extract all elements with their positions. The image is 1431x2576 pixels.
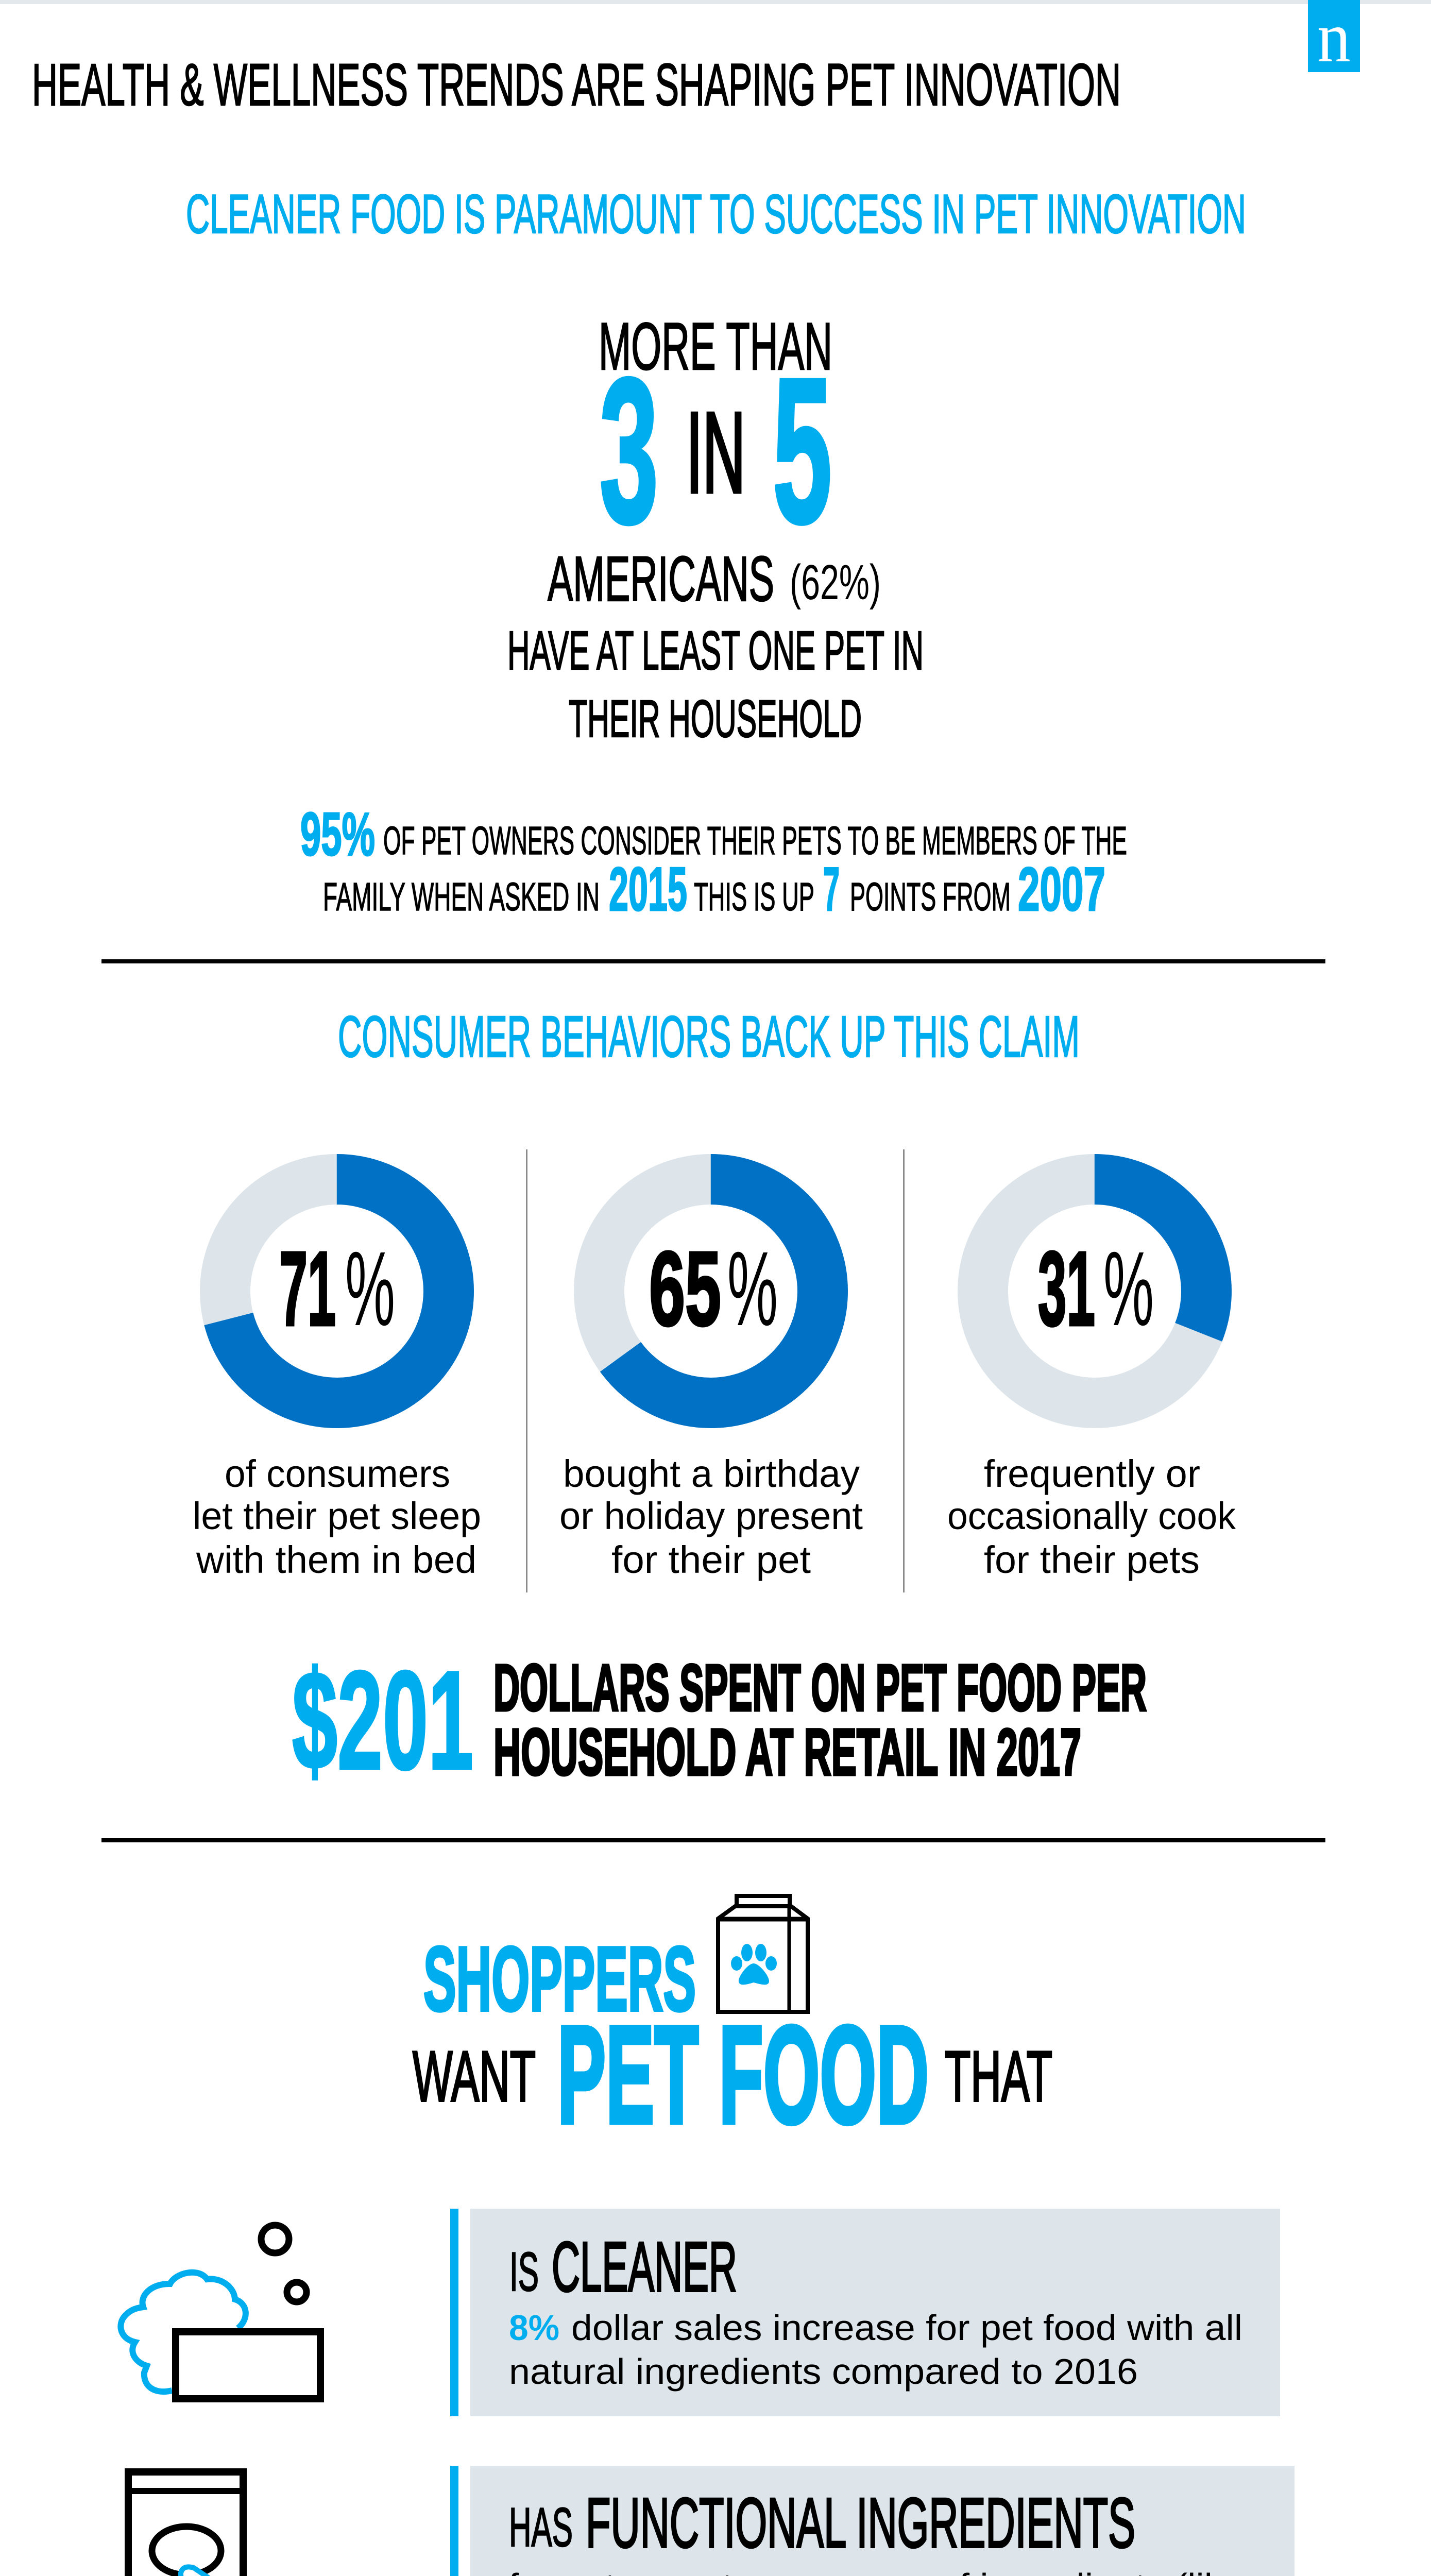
- stat: 95% of pet owners: THIS IS UP: [694, 875, 814, 919]
- donut: 65% birthday present: bought a birthday: [563, 1452, 860, 1495]
- callout: is cleaner: IS: [509, 2241, 539, 2302]
- icon: pet food carton with paw: [718, 1896, 808, 2012]
- callout: is cleaner: [450, 2209, 1280, 2416]
- stat: more than 3 in 5 Americans: [507, 309, 924, 748]
- icon: food bag, bowl and spoon: [128, 2472, 316, 2576]
- donut: 31% cook for pets: for their pets: [984, 1538, 1200, 1581]
- heading: shoppers want pet food that: WANT: [413, 2037, 536, 2116]
- donut: 65% birthday present: for their pet: [611, 1538, 811, 1581]
- stat: 95% of pet owners: FAMILY WHEN ASKED IN: [323, 875, 600, 919]
- donut: 71% sleep in bed: 71: [279, 1230, 336, 1348]
- heading: shoppers want pet food that: SHOPPERS: [423, 1928, 696, 2030]
- stat: more than 3 in 5 Americans: HAVE AT LEAST ONE PET IN: [507, 620, 924, 681]
- donut: 65% birthday present: %: [727, 1230, 778, 1348]
- callout: is cleaner: CLEANER: [552, 2228, 737, 2307]
- donut: 71% sleep in bed: [193, 1179, 481, 1581]
- stat: more than 3 in 5 Americans: MORE THAN: [599, 309, 832, 384]
- stat: more than 3 in 5 Americans: (62%): [790, 555, 881, 610]
- stat: $201 per household: $201: [292, 1642, 473, 1799]
- stat: more than 3 in 5 Americans: THEIR HOUSEHOLD: [569, 689, 862, 748]
- donut: 31% cook for pets: frequently or: [984, 1452, 1200, 1495]
- donut: 31% cook for pets: occasionally cook: [947, 1495, 1236, 1537]
- callout: is cleaner: dollar sales increase for pet food with all: [571, 2308, 1242, 2348]
- callout: is cleaner: natural ingredients compared to 2016: [509, 2351, 1138, 2392]
- stat: 95% of pet owners: 95%: [300, 800, 375, 869]
- heading: shoppers want pet food that: [413, 1928, 1052, 2153]
- stat: more than 3 in 5 Americans: 5: [773, 335, 832, 566]
- callout: is cleaner: 8%: [509, 2308, 559, 2348]
- stat: more than 3 in 5 Americans: IN: [686, 389, 745, 517]
- stat: more than 3 in 5 Americans: 3: [600, 335, 658, 566]
- donut: 65% birthday present: or holiday present: [559, 1495, 863, 1537]
- donut: 71% sleep in bed: let their pet sleep: [193, 1495, 481, 1537]
- donut: 31% cook for pets: [947, 1179, 1236, 1581]
- donut: 71% sleep in bed: with them in bed: [196, 1538, 476, 1581]
- donut: 65% birthday present: 65: [649, 1230, 721, 1348]
- stat: 95% of pet owners: 2015: [609, 855, 687, 924]
- stat: 95% of pet owners: POINTS FROM: [850, 875, 1011, 919]
- callout: has functional ingredients: HAS: [509, 2496, 573, 2558]
- stat: 95% of pet owners: 7: [823, 855, 840, 924]
- stat: more than 3 in 5 Americans: AMERICANS: [548, 544, 774, 615]
- stat: 95% of pet owners: [300, 800, 1127, 924]
- donut: 31% cook for pets: 31: [1038, 1230, 1095, 1348]
- logo: Nielsen: [1308, 0, 1360, 77]
- donut: 71% sleep in bed: of consumers: [225, 1452, 450, 1495]
- donut: 71% sleep in bed: %: [345, 1230, 395, 1348]
- donut: 65% birthday present: [559, 1179, 863, 1581]
- stat: 95% of pet owners: 2007: [1018, 855, 1105, 924]
- stat: $201 per household: [292, 1642, 1147, 1799]
- donut: 31% cook for pets: %: [1103, 1230, 1154, 1348]
- callout: has functional ingredients: [450, 2466, 1294, 2576]
- icon: soap and bubbles: [121, 2225, 320, 2399]
- heading: shoppers want pet food that: THAT: [945, 2037, 1052, 2116]
- heading: shoppers want pet food that: PET FOOD: [557, 1997, 929, 2153]
